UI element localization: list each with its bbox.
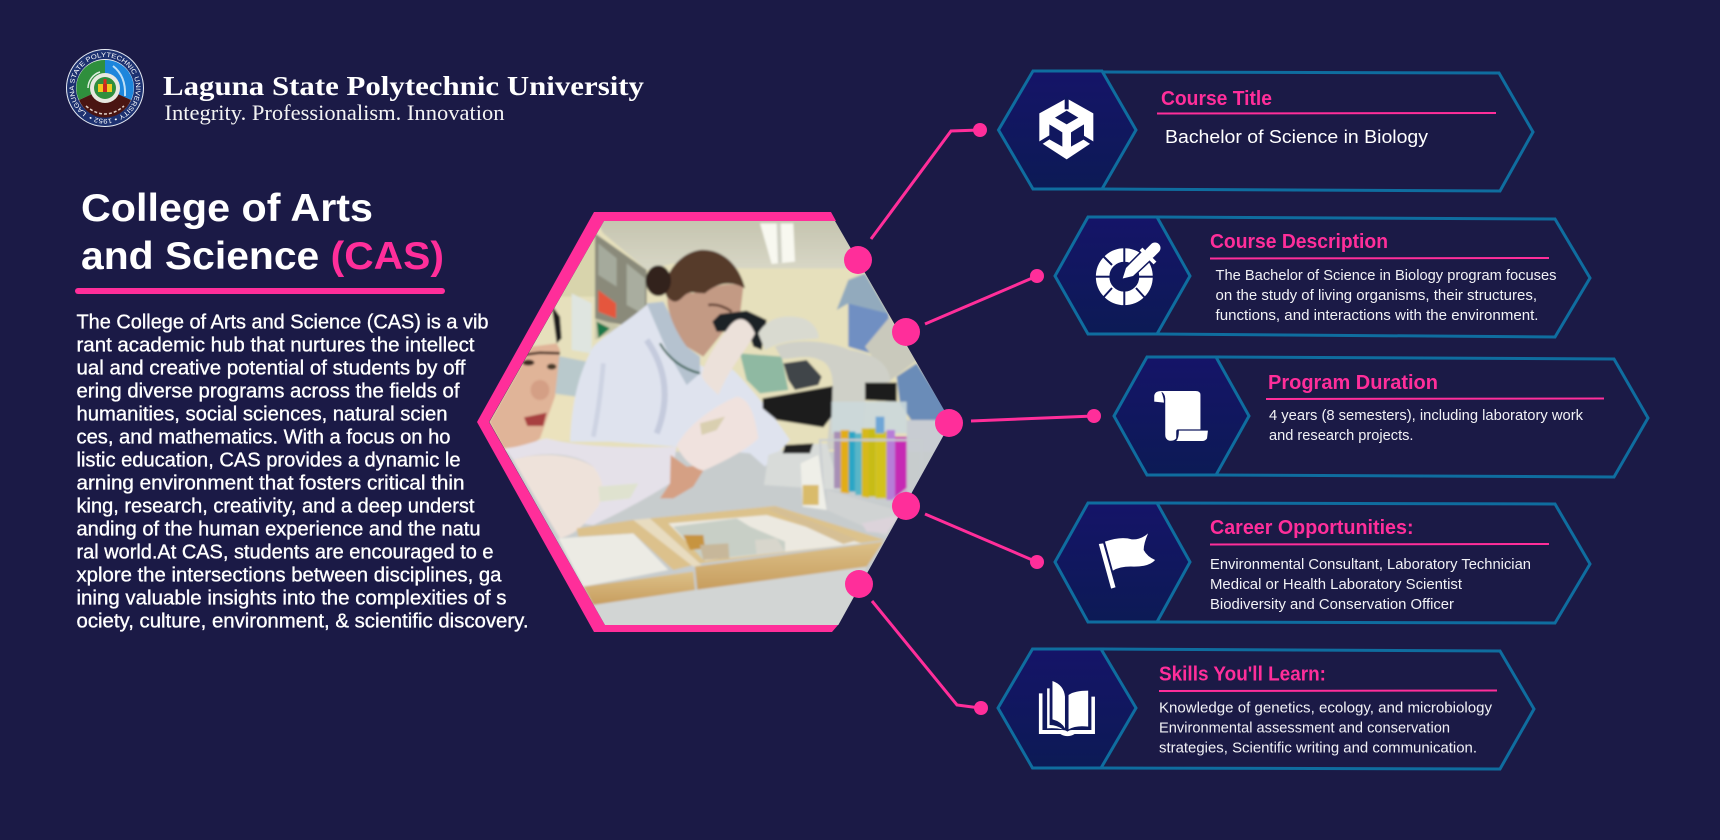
duration text bbox=[1269, 407, 1583, 444]
heading: Course Description bbox=[1210, 231, 1388, 253]
intro paragraph: listic education, CAS provides a dynamic le bbox=[76, 449, 460, 471]
intro paragraph: ociety, culture, environment, & scientific discovery. bbox=[76, 610, 528, 632]
title: College of Arts bbox=[81, 187, 373, 230]
connector node 5 bbox=[845, 570, 873, 598]
connector line to career opportunities bbox=[925, 514, 1044, 569]
heading: Course Title bbox=[1161, 88, 1272, 110]
description text: The Bachelor of Science in Biology program focuses bbox=[1216, 267, 1556, 284]
intro paragraph: xplore the intersections between disciplines, ga bbox=[76, 564, 502, 586]
description text: on the study of living organisms, their structures, bbox=[1216, 287, 1537, 304]
panel: skills bbox=[998, 649, 1534, 769]
icon: open book bbox=[1039, 681, 1095, 736]
heading rule bbox=[1210, 543, 1549, 546]
duration text: and research projects. bbox=[1269, 427, 1414, 444]
central hexagon lab photo (illustrated) bbox=[490, 221, 944, 625]
panel: course title bbox=[998, 71, 1533, 191]
duration text: 4 years (8 semesters), including laboratory work bbox=[1269, 407, 1583, 424]
careers text bbox=[1210, 556, 1531, 613]
university name: Laguna State Polytechnic University bbox=[163, 71, 645, 101]
connector node 1 bbox=[844, 246, 872, 274]
skills text: strategies, Scientific writing and communication. bbox=[1159, 740, 1477, 757]
university logo seal: LAGUNA STATE POLYTECHNIC UNIVERSITY • 1952 • bbox=[69, 52, 141, 124]
intro paragraph: ual and creative potential of students by off bbox=[76, 357, 466, 379]
connector line to skills bbox=[872, 601, 988, 715]
careers text: Medical or Health Laboratory Scientist bbox=[1210, 576, 1463, 593]
connector line to course title bbox=[871, 123, 987, 239]
intro paragraph: ering diverse programs across the fields of bbox=[76, 380, 460, 402]
heading: Skills You'll Learn: bbox=[1159, 664, 1326, 686]
connector node 2 bbox=[892, 318, 920, 346]
careers text: Environmental Consultant, Laboratory Technician bbox=[1210, 556, 1531, 573]
intro paragraph bbox=[76, 311, 528, 632]
course name: Bachelor of Science in Biology bbox=[1165, 127, 1428, 147]
intro paragraph: The College of Arts and Science (CAS) is a vib bbox=[76, 311, 488, 333]
icon: unity cube bbox=[1037, 97, 1095, 159]
motto: Integrity. Professionalism. Innovation bbox=[164, 100, 504, 125]
intro paragraph: arning environment that fosters critical thin bbox=[76, 472, 464, 494]
title: and Science (CAS) bbox=[81, 235, 444, 278]
intro paragraph: ces, and mathematics. With a focus on ho bbox=[76, 426, 450, 448]
icon: flag bbox=[1099, 533, 1155, 589]
connector node 4 bbox=[892, 492, 920, 520]
description text: functions, and interactions with the environment. bbox=[1216, 307, 1538, 324]
heading rule bbox=[1266, 398, 1604, 400]
heading rule bbox=[1210, 257, 1549, 260]
connector node 3 bbox=[935, 409, 963, 437]
heading: Career Opportunities: bbox=[1210, 517, 1414, 539]
skills text bbox=[1159, 700, 1492, 757]
intro paragraph: ining valuable insights into the complexities of s bbox=[76, 587, 506, 609]
intro paragraph: rant academic hub that nurtures the intellect bbox=[76, 334, 475, 356]
intro paragraph: ral world.At CAS, students are encouraged to e bbox=[76, 541, 494, 563]
panel: course description bbox=[1055, 217, 1590, 337]
panel: career opportunities bbox=[1055, 503, 1590, 623]
skills text: Knowledge of genetics, ecology, and microbiology bbox=[1159, 700, 1492, 717]
icon: scroll bbox=[1154, 391, 1208, 441]
icon: color wheel with dropper bbox=[1095, 247, 1155, 307]
description text bbox=[1216, 267, 1556, 324]
title bbox=[81, 187, 444, 278]
careers text: Biodiversity and Conservation Officer bbox=[1210, 596, 1454, 613]
intro paragraph: king, research, creativity, and a deep underst bbox=[76, 495, 475, 517]
connector line to course description bbox=[925, 269, 1044, 324]
heading rule bbox=[1159, 690, 1497, 692]
heading: Program Duration bbox=[1268, 372, 1438, 394]
heading rule bbox=[1157, 112, 1496, 114]
intro paragraph: humanities, social sciences, natural scien bbox=[76, 403, 448, 425]
title underline bbox=[75, 288, 445, 294]
connector line to program duration bbox=[971, 409, 1101, 423]
skills text: Environmental assessment and conservation bbox=[1159, 720, 1450, 737]
intro paragraph: anding of the human experience and the natu bbox=[76, 518, 480, 540]
central hexagon pink frame bbox=[477, 212, 838, 632]
panel: program duration bbox=[1114, 357, 1648, 477]
